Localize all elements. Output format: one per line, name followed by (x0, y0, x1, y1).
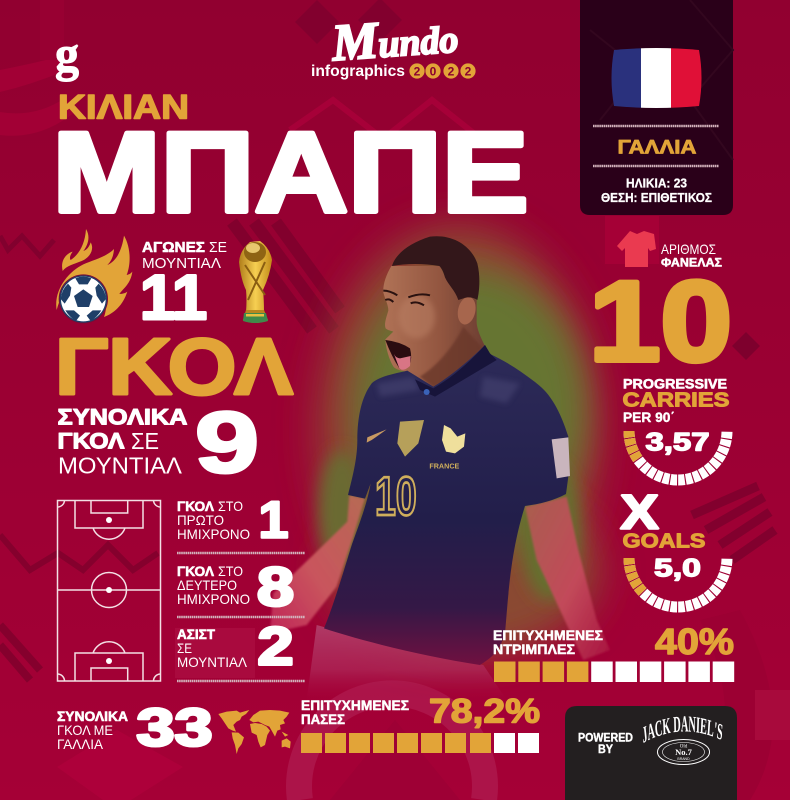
first name: ΚΙΛΙΑΝ (58, 88, 189, 126)
second half goals: ΗΜΙΧΡΟΝΟ (177, 591, 250, 607)
second half goals: ΓΚΟΛ (177, 563, 215, 579)
icon: world map (218, 710, 291, 754)
second half goals (177, 556, 294, 618)
dribbles stat (493, 621, 734, 682)
assists: ΜΟΥΝΤΙΑΛ (177, 654, 248, 670)
appearances label: ΣΕ (209, 239, 227, 256)
expected goals gauge (629, 554, 727, 607)
year badges: 2 (414, 64, 421, 78)
assists: 2 (258, 616, 294, 676)
country panel (580, 0, 733, 215)
mundo wordmark: Mundo (329, 7, 460, 72)
dribbles bar (494, 662, 734, 682)
first half goals (177, 492, 288, 550)
left arm (270, 495, 365, 633)
neck shadow (420, 327, 483, 388)
total world cup goals label: ΓΚΟΛ (58, 428, 124, 453)
shirt label: ΑΡΙΘΜΟΣ (661, 241, 716, 257)
nike swoosh (367, 429, 387, 443)
jersey highlights (377, 377, 520, 403)
icon: world cup trophy (239, 241, 272, 323)
jersey number: 10 (375, 465, 417, 527)
first half goals: 1 (258, 492, 288, 550)
total world cup goals label (58, 404, 188, 478)
dribbles stat: ΕΠΙΤΥΧΗΜΕΝΕΣ (493, 627, 603, 643)
icon: shirt (617, 231, 656, 267)
second half goals: 8 (257, 556, 294, 618)
sponsor panel (565, 706, 737, 800)
passes stat: ΠΑΣΕΣ (301, 711, 345, 727)
sleeve patch (552, 437, 570, 478)
france goals: ΣΥΝΟΛΙΚΑ (57, 708, 128, 724)
second half goals: ΔΕΥΤΕΡΟ (177, 577, 237, 593)
badge (397, 420, 424, 457)
mundo logo (311, 7, 476, 80)
ear (455, 295, 478, 326)
cheek highlight (398, 295, 435, 338)
france goals (57, 698, 212, 758)
last name: ΜΠΑΠΕ (52, 110, 528, 236)
age: ΗΛΙΚΙΑ: 23 (626, 176, 687, 190)
player photo (270, 236, 610, 700)
first half goals: ΗΜΙΧΡΟΝΟ (177, 526, 250, 542)
expected goals gauge: 5,0 (654, 554, 701, 582)
sponsor logo: No.7 (675, 747, 693, 757)
assists (177, 616, 294, 676)
sponsor logo (643, 716, 722, 765)
second half goals: ΣΤΟ (218, 563, 243, 579)
france goals: 33 (136, 698, 212, 758)
shorts (307, 625, 507, 700)
progressive carries heading (622, 376, 730, 425)
shirt label (661, 241, 722, 270)
appearances label: ΜΟΥΝΤΙΑΛ (142, 255, 221, 272)
country name: ΓΑΛΛΙΑ (618, 136, 696, 158)
progressive carries heading: PROGRESSIVE (623, 376, 727, 392)
expected goals heading: GOALS (622, 530, 706, 552)
sponsor logo: BRAND (677, 757, 690, 761)
progressive carries gauge: 3,57 (646, 428, 710, 456)
year badges (409, 63, 476, 79)
first half goals: ΠΡΩΤΟ (177, 512, 224, 528)
position: ΘΕΣΗ: ΕΠΙΘΕΤΙΚΟΣ (601, 190, 712, 205)
shirt number: 10 (589, 258, 732, 386)
federation text: FRANCE (429, 461, 459, 470)
expected goals heading (620, 487, 706, 552)
france goals: ΓΚΟΛ ΜΕ (57, 722, 113, 738)
appearances number: 11 (140, 263, 207, 333)
jersey (324, 345, 568, 665)
year badges: 2 (465, 64, 472, 78)
progressive carries heading: PER 90΄ (623, 409, 675, 425)
football pitch (58, 500, 160, 681)
sponsor panel: BY (598, 744, 613, 756)
progressive carries gauge (629, 428, 727, 480)
passes stat (301, 692, 540, 753)
powered by: POWERED (578, 732, 633, 744)
right arm (525, 497, 610, 660)
dribbles stat: ΝΤΡΙΜΠΛΕΣ (493, 641, 575, 657)
collar (415, 345, 497, 397)
year badges: 2 (448, 64, 455, 78)
assists: ΣΕ (177, 640, 192, 656)
icon: fireball (56, 229, 132, 324)
year badges: 0 (430, 64, 437, 78)
assists: ΑΣΙΣΤ (177, 626, 215, 642)
total world cup goals label: ΣΥΝΟΛΙΚΑ (58, 404, 188, 429)
sponsor logo: Old (680, 744, 688, 750)
dribbles stat: 40% (655, 621, 734, 662)
passes stat: 78,2% (429, 692, 540, 730)
neck and face (383, 266, 486, 388)
expected goals heading: X (620, 487, 658, 540)
shirt label: ΦΑΝΕΛΑΣ (661, 256, 722, 270)
sponsor logo: JACK DANIEL'S (643, 716, 722, 743)
first half goals: ΣΤΟ (218, 498, 243, 514)
rooster (442, 425, 465, 453)
progressive carries heading: CARRIES (622, 390, 730, 412)
infographics label: infographics (311, 63, 405, 80)
eyes and brows (383, 291, 430, 305)
france goals: ΓΑΛΛΙΑ (57, 736, 104, 752)
passes stat: ΕΠΙΤΥΧΗΜΕΝΕΣ (301, 697, 409, 713)
flag of France (612, 48, 702, 108)
total world cup goals label: ΜΟΥΝΤΙΑΛ (58, 452, 183, 478)
mouth (385, 340, 411, 369)
brand logo: g (55, 26, 79, 82)
button (424, 389, 430, 395)
goals heading: ΓΚΟΛ (55, 322, 293, 411)
appearances label: ΑΓΩΝΕΣ (142, 239, 205, 256)
total world cup goals number: 9 (195, 395, 259, 491)
total world cup goals label: ΣΕ (131, 428, 159, 454)
passes bar (301, 733, 539, 753)
first half goals: ΓΚΟΛ (177, 498, 215, 514)
hair (392, 236, 479, 300)
photo background glow (318, 225, 600, 655)
appearances label (142, 239, 227, 272)
